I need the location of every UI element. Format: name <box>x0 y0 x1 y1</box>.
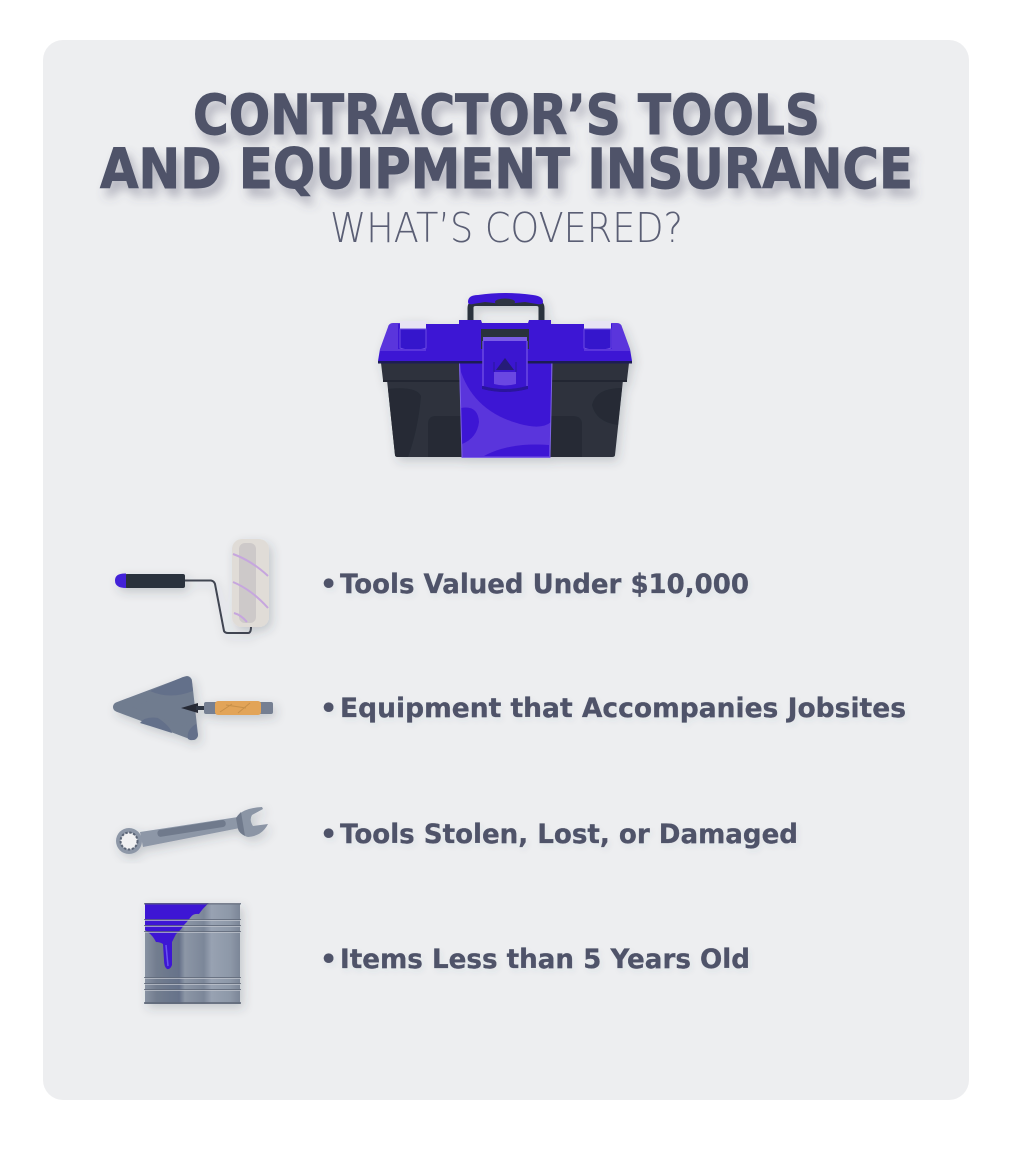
icon: trowel <box>118 677 273 740</box>
label: Tools Stolen, Lost, or Damaged <box>340 819 798 850</box>
title <box>100 83 913 201</box>
label: • <box>320 569 337 600</box>
label: Tools Valued Under $10,000 <box>340 569 749 600</box>
icon: paint can <box>144 903 241 1004</box>
title: CONTRACTOR’S TOOLS <box>193 83 820 147</box>
item 3: wrench <box>116 807 798 854</box>
icon: paint roller <box>115 539 269 633</box>
strap <box>459 363 552 458</box>
item 4: paint can <box>144 903 750 1004</box>
lid <box>380 323 630 349</box>
item 2: trowel <box>118 677 906 740</box>
latch <box>482 386 528 392</box>
title: AND EQUIPMENT INSURANCE <box>100 137 913 201</box>
label: • <box>320 819 337 850</box>
label: • <box>320 944 337 975</box>
clips <box>400 321 611 331</box>
item 1: paint roller <box>115 539 749 633</box>
icon: toolbox <box>378 293 632 458</box>
icon: wrench <box>116 807 268 854</box>
subtitle: WHAT’S COVERED? <box>330 204 683 252</box>
handle <box>468 293 543 322</box>
rim <box>378 349 632 361</box>
label: • <box>320 693 337 724</box>
body <box>381 363 629 457</box>
label: Equipment that Accompanies Jobsites <box>340 693 906 724</box>
label: Items Less than 5 Years Old <box>340 944 750 975</box>
